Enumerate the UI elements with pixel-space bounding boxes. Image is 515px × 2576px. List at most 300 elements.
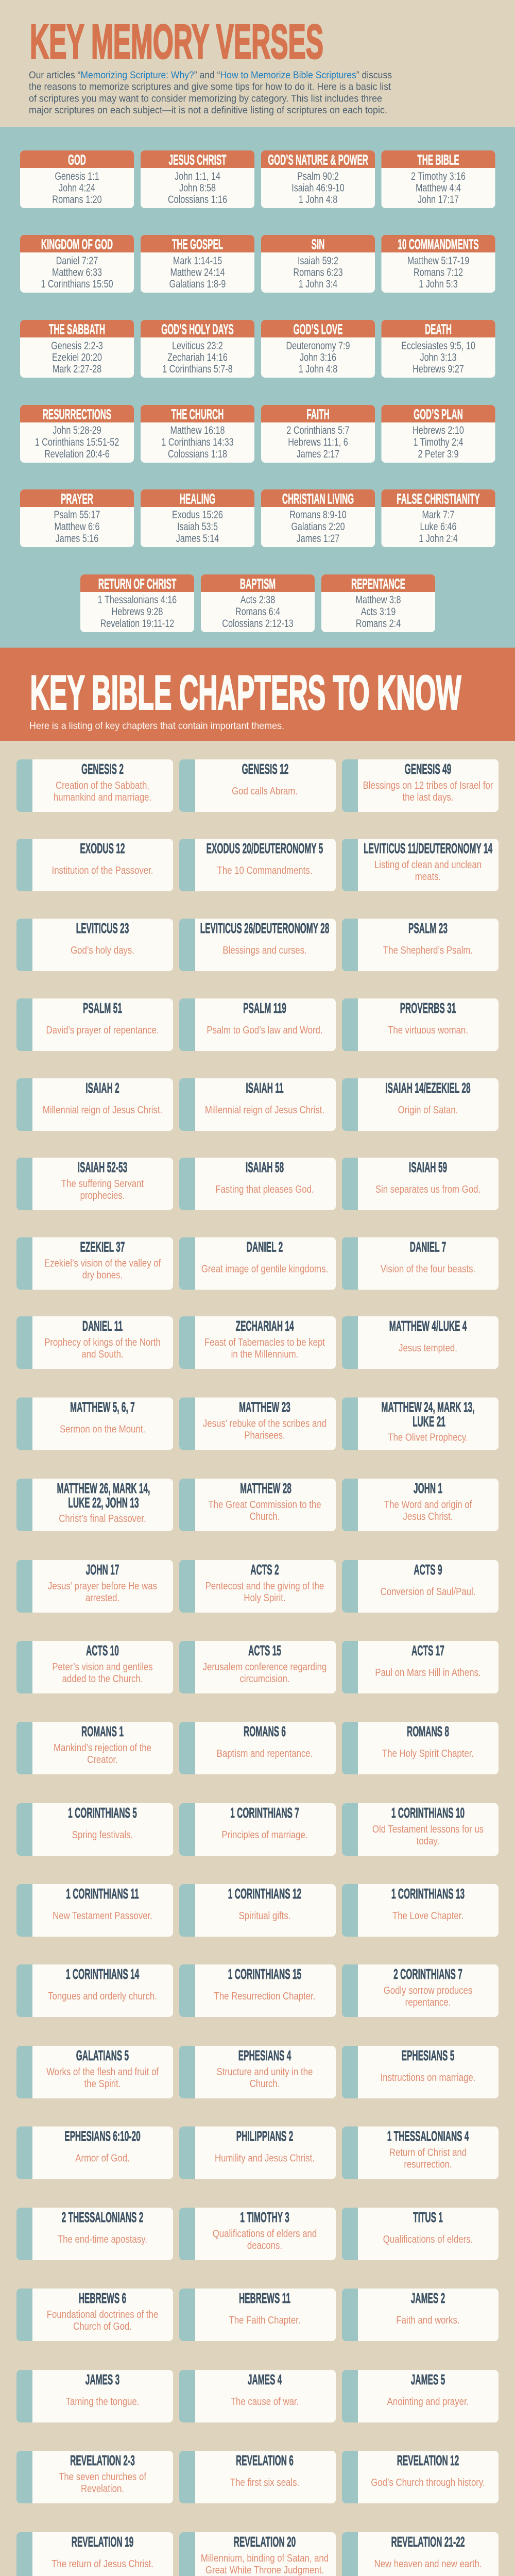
- card: The Church: [141, 405, 254, 463]
- card: Kingdom of God: KINGDOM OF GOD: [41, 236, 113, 252]
- card: John 1: The Word and origin of: [384, 1499, 472, 1510]
- card: 1 Timothy 3: Qualifications of elders and: [213, 2228, 317, 2239]
- card: 1 Corinthians 15: The Resurrection Chapter.: [214, 1990, 315, 2002]
- card: Galatians 5: Works of the flesh and fruit of: [46, 2066, 159, 2077]
- card: Return of Christ: Revelation 19:11-12: [100, 617, 174, 629]
- card: Proverbs 31: PROVERBS 31: [400, 1000, 456, 1016]
- card: Jesus Christ: JESUS CHRIST: [169, 152, 227, 168]
- card: The Gospel: Galatians 1:8-9: [169, 278, 226, 290]
- card: Baptism: Colossians 2:12-13: [222, 617, 294, 629]
- card: God's Love: John 3:16: [300, 351, 336, 363]
- card: The Church: THE CHURCH: [171, 406, 224, 422]
- card: Acts 9: ACTS 9: [414, 1562, 442, 1578]
- card: The Church: Colossians 1:18: [168, 448, 227, 460]
- section: key memory verses: [0, 0, 515, 648]
- card: John 17: arrested.: [85, 1592, 119, 1603]
- card: God's Holy Days: 1 Corinthians 5:7-8: [162, 363, 233, 375]
- card: God's nature and power: Isaiah 46:9-10: [291, 181, 345, 194]
- card: Healing: [141, 489, 254, 547]
- card: Kingdom of God: Matthew 6:33: [52, 266, 102, 278]
- card: James 2: JAMES 2: [411, 2290, 445, 2306]
- card: Repentance: REPENTANCE: [351, 576, 405, 592]
- card: Acts 9: [342, 1560, 499, 1613]
- intro paragraph: major scriptures on each subject—it is not a definitive listing of scriptures on each topic.: [29, 105, 387, 116]
- card: Galatians 5: the Spirit.: [84, 2078, 121, 2089]
- card: 1 Corinthians 11: 1 CORINTHIANS 11: [66, 1886, 139, 1902]
- card: James 5: [342, 2370, 499, 2422]
- card: 1 Corinthians 13: 1 CORINTHIANS 13: [391, 1886, 465, 1902]
- card: Death: Ecclesiastes 9:5, 10: [401, 340, 475, 351]
- card: John 1: [342, 1479, 499, 1531]
- card: John 17: Jesus’ prayer before He was: [48, 1580, 157, 1591]
- card: James 4: [179, 2370, 336, 2422]
- card: Isaiah 11: Millennial reign of Jesus Christ.: [205, 1104, 324, 1115]
- card: God's Holy Days: Zechariah 14:16: [167, 351, 228, 363]
- card: 1 Thessalonians 4: resurrection.: [404, 2158, 452, 2170]
- card: 1 Corinthians 11: [16, 1884, 173, 1937]
- card: Baptism: [201, 574, 315, 632]
- card: Acts 15: ACTS 15: [248, 1642, 281, 1658]
- card: The Church: Matthew 16:18: [170, 424, 225, 436]
- card: Acts 2: ACTS 2: [250, 1562, 279, 1578]
- card: God's Love: [261, 320, 375, 378]
- card: Genesis 49: the last days.: [403, 791, 453, 803]
- card: Faith: 2 Corinthians 5:7: [286, 424, 350, 436]
- card: Isaiah 2: ISAIAH 2: [85, 1080, 119, 1096]
- card: Ephesians 4: Structure and unity in the: [217, 2066, 313, 2077]
- card: Acts 15: [179, 1641, 336, 1693]
- card: Christian Living: [261, 489, 375, 547]
- card: God's Holy Days: [141, 320, 254, 378]
- card: Kingdom of God: Daniel 7:27: [56, 255, 98, 266]
- card: Romans 1: Creator.: [87, 1754, 118, 1765]
- card: Revelation 20: Great White Throne Judgment.: [205, 2564, 324, 2575]
- card: Acts 17: [342, 1641, 499, 1693]
- card: Sin: Romans 6:23: [293, 266, 343, 278]
- card: Revelation 21-22: [342, 2532, 499, 2576]
- card: God's Plan: 2 Peter 3:9: [418, 448, 459, 460]
- card: Matthew 5, 6, 7: MATTHEW 5, 6, 7: [70, 1399, 135, 1415]
- card: Jesus Christ: John 1:1, 14: [175, 170, 220, 182]
- card: 1 Corinthians 13: [342, 1884, 499, 1937]
- card: Leviticus 11 / Deuteronomy 14: meats.: [415, 871, 441, 882]
- card: Ephesians 5: Instructions on marriage.: [381, 2072, 475, 2083]
- card: Resurrections: 1 Corinthians 15:51-52: [35, 436, 119, 448]
- card: Ezekiel 37: EZEKIEL 37: [80, 1239, 125, 1255]
- card: The Gospel: THE GOSPEL: [172, 236, 223, 252]
- card: Resurrections: Revelation 20:4-6: [44, 448, 110, 460]
- intro paragraph: of scriptures you may want to consider memorizing by category. This list includes three: [29, 93, 382, 104]
- card: John 1: Jesus Christ.: [403, 1511, 453, 1522]
- card: 1 Corinthians 12: 1 CORINTHIANS 12: [228, 1886, 301, 1902]
- card: Resurrections: RESURRECTIONS: [43, 406, 111, 422]
- card: Zechariah 14: ZECHARIAH 14: [236, 1318, 294, 1334]
- card: 1 Corinthians 10: [342, 1803, 499, 1856]
- card: Psalm 119: Psalm to God’s law and Word.: [207, 1024, 323, 1036]
- card: Romans 6: [179, 1722, 336, 1774]
- card: Acts 10: [16, 1641, 173, 1693]
- card: Romans 1: ROMANS 1: [81, 1723, 124, 1739]
- card: Kingdom of God: [20, 235, 134, 293]
- card: Death: Hebrews 9:27: [413, 363, 464, 375]
- card: Leviticus 26 / Deuteronomy 28: [179, 919, 336, 971]
- card: Ephesians 6:10-20: Armor of God.: [75, 2152, 130, 2164]
- card: 1 Corinthians 5: [16, 1803, 173, 1856]
- card: Acts 10: Peter’s vision and gentiles: [52, 1661, 153, 1672]
- card: Exodus 12: Institution of the Passover.: [52, 865, 153, 876]
- card: Matthew 26, Mark 14, Luke 22, John 13: MATTHEW 26, MARK 14,: [57, 1480, 150, 1496]
- card: Isaiah 11: ISAIAH 11: [246, 1080, 284, 1096]
- card: Isaiah 2: Millennial reign of Jesus Christ.: [43, 1104, 162, 1115]
- card: Sin: [261, 235, 375, 293]
- card: Psalm 23: PSALM 23: [408, 920, 448, 936]
- card: Revelation 6: [179, 2451, 336, 2503]
- card: Genesis 2: Creation of the Sabbath,: [56, 779, 149, 791]
- card: Matthew 26, Mark 14, Luke 22, John 13: LUKE 22, JOHN 13: [68, 1495, 139, 1511]
- card: Death: DEATH: [425, 321, 452, 337]
- card: Genesis 12: [179, 759, 336, 812]
- card: Sin: Isaiah 59:2: [298, 255, 338, 266]
- card: Faith: James 2:17: [297, 448, 339, 460]
- card: Matthew 28: Church.: [250, 1511, 280, 1522]
- card: False Christianity: Mark 7:7: [422, 509, 454, 520]
- card: Romans 8: ROMANS 8: [407, 1723, 449, 1739]
- card: Sin: 1 John 3:4: [299, 278, 337, 290]
- card: James 5: Anointing and prayer.: [387, 2396, 469, 2407]
- card: Matthew 5, 6, 7: Sermon on the Mount.: [60, 1423, 145, 1435]
- card: Ezekiel 37: [16, 1238, 173, 1290]
- card: Titus 1: Qualifications of elders.: [383, 2233, 473, 2245]
- card: Psalm 119: [179, 998, 336, 1051]
- card: Genesis 12: God calls Abram.: [232, 785, 298, 796]
- card: 10 Commandments: 1 John 5:3: [419, 278, 458, 290]
- card: Acts 2: Pentecost and the giving of the: [205, 1580, 324, 1591]
- card: Titus 1: [342, 2208, 499, 2260]
- card: Zechariah 14: [179, 1316, 336, 1369]
- card: Leviticus 26 / Deuteronomy 28: LEVITICUS 26/DEUTERONOMY 28: [200, 920, 329, 936]
- card: Genesis 49: GENESIS 49: [405, 761, 451, 777]
- card: Repentance: Matthew 3:8: [355, 594, 401, 605]
- card: Romans 1: [16, 1722, 173, 1774]
- card: Resurrections: [20, 405, 134, 463]
- card: God's Plan: 1 Timothy 2:4: [413, 436, 464, 448]
- card: Ephesians 6:10-20: [16, 2127, 173, 2179]
- card: Acts 15: circumcision.: [239, 1673, 290, 1684]
- card: John 1: JOHN 1: [414, 1480, 442, 1496]
- card: 1 Timothy 3: 1 TIMOTHY 3: [240, 2209, 289, 2225]
- subtitle: Here is a listing of key chapters that contain important themes.: [29, 720, 284, 732]
- card: The Bible: John 17:17: [418, 193, 459, 205]
- card: Repentance: [321, 574, 435, 632]
- card: Christian Living: Galatians 2:20: [291, 520, 345, 532]
- card: Prayer: Psalm 55:17: [54, 509, 100, 520]
- card: God's Plan: Hebrews 2:10: [413, 424, 464, 436]
- card: Matthew 28: [179, 1479, 336, 1531]
- card: Zechariah 14: in the Millennium.: [231, 1348, 298, 1360]
- card: The Church: 1 Corinthians 14:33: [161, 436, 234, 448]
- card: Genesis 12: GENESIS 12: [242, 761, 288, 777]
- card: Genesis 2: [16, 759, 173, 812]
- card: Acts 17: Paul on Mars Hill in Athens.: [375, 1667, 481, 1678]
- card: The Sabbath: Genesis 2:2-3: [51, 340, 103, 351]
- card: God: Romans 1:20: [52, 193, 102, 205]
- card: Hebrews 6: [16, 2289, 173, 2341]
- card: 1 Corinthians 12: Spiritual gifts.: [239, 1910, 290, 1921]
- card: 1 Timothy 3: deacons.: [247, 2240, 282, 2251]
- card: God's Holy Days: Leviticus 23:2: [172, 340, 223, 351]
- card: 1 Corinthians 15: 1 CORINTHIANS 15: [228, 1966, 301, 1982]
- card: 2 Corinthians 7: repentance.: [405, 1996, 451, 2008]
- card: Prayer: PRAYER: [61, 491, 93, 507]
- card: Daniel 7: [342, 1238, 499, 1290]
- card: Revelation 20: [179, 2532, 336, 2576]
- card: Ephesians 4: EPHESIANS 4: [238, 2047, 291, 2063]
- card: Revelation 21-22: REVELATION 21-22: [391, 2534, 465, 2550]
- card: Philippians 2: Humility and Jesus Christ.: [215, 2152, 315, 2164]
- card: Prayer: James 5:16: [56, 532, 98, 544]
- card: The Sabbath: Mark 2:27-28: [53, 363, 101, 375]
- card: James 2: [342, 2289, 499, 2341]
- card: 1 Corinthians 10: today.: [417, 1835, 439, 1846]
- card: 1 Thessalonians 4: 1 THESSALONIANS 4: [387, 2128, 469, 2144]
- card: 2 Thessalonians 2: 2 THESSALONIANS 2: [62, 2209, 143, 2225]
- card: Ephesians 4: Church.: [250, 2078, 280, 2089]
- card: James 3: Taming the tongue.: [66, 2396, 139, 2407]
- card: Return of Christ: RETURN OF CHRIST: [98, 576, 176, 592]
- card: God's Love: Deuteronomy 7:9: [286, 340, 350, 351]
- card: Daniel 2: Great image of gentile kingdoms.: [201, 1263, 328, 1275]
- card: Leviticus 23: LEVITICUS 23: [76, 920, 129, 936]
- card: Daniel 11: and South.: [81, 1348, 124, 1360]
- card: 2 Corinthians 7: [342, 1964, 499, 2017]
- card: Revelation 2-3: REVELATION 2-3: [70, 2452, 135, 2468]
- card: Revelation 21-22: New heaven and new earth.: [374, 2558, 482, 2569]
- card: Healing: HEALING: [180, 491, 215, 507]
- card: Isaiah 52-53: The suffering Servant: [61, 1178, 144, 1189]
- card: Zechariah 14: Feast of Tabernacles to be kept: [204, 1336, 325, 1348]
- card: Return of Christ: Hebrews 9:28: [112, 605, 163, 617]
- card: Revelation 19: REVELATION 19: [72, 2534, 133, 2550]
- card: False Christianity: 1 John 2:4: [419, 532, 458, 544]
- card: Healing: Isaiah 53:5: [177, 520, 218, 532]
- card: Romans 6: ROMANS 6: [244, 1723, 286, 1739]
- card: Kingdom of God: 1 Corinthians 15:50: [41, 278, 113, 290]
- card: The Bible: 2 Timothy 3:16: [411, 170, 466, 182]
- card: Faith: Hebrews 11:1, 6: [288, 436, 348, 448]
- card: God's nature and power: GOD’S NATURE & POWER: [268, 152, 368, 168]
- card: Isaiah 59: ISAIAH 59: [409, 1159, 447, 1175]
- card: Christian Living: CHRISTIAN LIVING: [282, 491, 354, 507]
- card: 1 Corinthians 10: 1 CORINTHIANS 10: [391, 1805, 465, 1821]
- card: Genesis 2: humankind and marriage.: [54, 791, 151, 803]
- card: Return of Christ: 1 Thessalonians 4:16: [98, 594, 177, 605]
- card: Death: [381, 320, 495, 378]
- card: James 5: JAMES 5: [411, 2371, 445, 2387]
- card: Philippians 2: [179, 2127, 336, 2179]
- card: Isaiah 14 / Ezekiel 28: Origin of Satan.: [398, 1104, 458, 1115]
- card: Matthew 23: [179, 1397, 336, 1450]
- card: Acts 17: ACTS 17: [411, 1642, 444, 1658]
- card: 1 Timothy 3: [179, 2208, 336, 2260]
- card: Psalm 51: [16, 998, 173, 1051]
- card: 1 Corinthians 15: [179, 1964, 336, 2017]
- card: Matthew 23: Pharisees.: [244, 1429, 285, 1441]
- card: Death: John 3:13: [420, 351, 457, 363]
- card: Baptism: BAPTISM: [240, 576, 276, 592]
- card: Leviticus 23: God’s holy days.: [71, 944, 134, 956]
- card: Isaiah 14 / Ezekiel 28: [342, 1078, 499, 1131]
- card: Christian Living: Romans 8:9-10: [289, 509, 347, 520]
- card: The Sabbath: [20, 320, 134, 378]
- card: Romans 1: Mankind’s rejection of the: [54, 1742, 151, 1753]
- card: False Christianity: Luke 6:46: [420, 520, 457, 532]
- card: Hebrews 11: The Faith Chapter.: [229, 2314, 301, 2326]
- card: Exodus 20 / Deuteronomy 5: EXODUS 20/DEUTERONOMY 5: [207, 840, 323, 856]
- card: Healing: James 5:14: [176, 532, 219, 544]
- card: Matthew 5, 6, 7: [16, 1397, 173, 1450]
- card: Matthew 26, Mark 14, Luke 22, John 13: Christ’s final Passover.: [59, 1513, 146, 1524]
- card: 2 Thessalonians 2: [16, 2208, 173, 2260]
- card: 1 Corinthians 14: Tongues and orderly church.: [48, 1990, 157, 2002]
- card: Exodus 20 / Deuteronomy 5: The 10 Commandments.: [217, 865, 312, 876]
- card: God: [20, 150, 134, 208]
- card: James 2: Faith and works.: [396, 2314, 460, 2326]
- card: Revelation 20: Millennium, binding of Satan, and: [201, 2552, 329, 2564]
- card: Psalm 23: [342, 919, 499, 971]
- card: Titus 1: TITUS 1: [413, 2209, 443, 2225]
- card: God's nature and power: [261, 150, 375, 208]
- card: The Gospel: Matthew 24:14: [170, 266, 225, 278]
- card: Revelation 12: God’s Church through history.: [371, 2477, 485, 2488]
- card: God: Genesis 1:1: [55, 170, 99, 182]
- card: 10 Commandments: 10 COMMANDMENTS: [398, 236, 479, 252]
- card: Revelation 2-3: The seven churches of: [59, 2471, 147, 2482]
- card: Christian Living: James 1:27: [297, 532, 339, 544]
- card: God's Love: 1 John 4:8: [299, 363, 337, 375]
- card: God's nature and power: 1 John 4:8: [299, 193, 337, 205]
- card: 2 Corinthians 7: 2 CORINTHIANS 7: [393, 1966, 462, 1982]
- card: God's Love: GOD’S LOVE: [294, 321, 342, 337]
- intro paragraph: [29, 70, 392, 116]
- card: Psalm 51: PSALM 51: [83, 1000, 122, 1016]
- card: God's Plan: [381, 405, 495, 463]
- card: 10 Commandments: Matthew 5:17-19: [407, 255, 469, 266]
- card: God's Plan: GOD’S PLAN: [414, 406, 463, 422]
- card: Jesus Christ: [141, 150, 254, 208]
- card: 1 Corinthians 5: 1 CORINTHIANS 5: [68, 1805, 137, 1821]
- card: Philippians 2: PHILIPPIANS 2: [236, 2128, 293, 2144]
- card: Revelation 12: [342, 2451, 499, 2503]
- card: Ezekiel 37: Ezekiel’s vision of the valley of: [44, 1257, 161, 1269]
- card: Isaiah 58: Fasting that pleases God.: [215, 1183, 314, 1195]
- card: Daniel 11: Prophecy of kings of the North: [44, 1336, 161, 1348]
- card: God's Holy Days: GOD’S HOLY DAYS: [161, 321, 234, 337]
- card: The Bible: [381, 150, 495, 208]
- card: Genesis 49: [342, 759, 499, 812]
- card: 1 Corinthians 11: New Testament Passover.: [53, 1910, 152, 1921]
- card: Daniel 11: DANIEL 11: [82, 1318, 123, 1334]
- card: Revelation 2-3: Revelation.: [81, 2483, 124, 2494]
- card: Healing: Exodus 15:26: [172, 509, 223, 520]
- card: Faith: FAITH: [306, 406, 330, 422]
- card: The Bible: Matthew 4:4: [416, 181, 461, 194]
- card: Leviticus 11 / Deuteronomy 14: LEVITICUS 11/DEUTERONOMY 14: [364, 840, 492, 856]
- card: Matthew 24, Mark 13, Luke 21: The Olivet Prophecy.: [388, 1431, 468, 1443]
- card: 1 Thessalonians 4: [342, 2127, 499, 2179]
- card: James 3: [16, 2370, 173, 2422]
- card: Romans 6: Baptism and repentance.: [217, 1748, 313, 1759]
- card: Baptism: Romans 6:4: [235, 605, 280, 617]
- card: Leviticus 26 / Deuteronomy 28: Blessings and curses.: [222, 944, 307, 956]
- card: John 17: [16, 1560, 173, 1613]
- card: Isaiah 2: [16, 1078, 173, 1131]
- card: Sin: SIN: [312, 236, 324, 252]
- card: Matthew 24, Mark 13, Luke 21: LUKE 21: [413, 1414, 445, 1430]
- card: Acts 2: Holy Spirit.: [244, 1592, 286, 1603]
- card: Leviticus 11 / Deuteronomy 14: Listing of clean and unclean: [374, 859, 482, 870]
- card: The Sabbath: Ezekiel 20:20: [52, 351, 102, 363]
- card: Jesus Christ: John 8:58: [179, 181, 216, 194]
- card: The Bible: THE BIBLE: [417, 152, 459, 168]
- card: 1 Corinthians 7: Principles of marriage.: [222, 1829, 307, 1840]
- card: Isaiah 11: [179, 1078, 336, 1131]
- card: Isaiah 52-53: prophecies.: [80, 1190, 125, 1201]
- card: Genesis 2: GENESIS 2: [81, 761, 124, 777]
- card: God's nature and power: Psalm 90:2: [297, 170, 339, 182]
- card: Daniel 2: DANIEL 2: [247, 1239, 283, 1255]
- card: Daniel 7: Vision of the four beasts.: [381, 1263, 475, 1275]
- card: Revelation 6: The first six seals.: [230, 2477, 299, 2488]
- card: Hebrews 6: Foundational doctrines of the: [47, 2309, 158, 2320]
- card: Isaiah 59: [342, 1158, 499, 1210]
- card: Prayer: Matthew 6:6: [54, 520, 100, 532]
- card: False Christianity: FALSE CHRISTIANITY: [397, 491, 480, 507]
- card: Revelation 19: [16, 2532, 173, 2576]
- card: Prayer: [20, 489, 134, 547]
- card: Exodus 12: [16, 839, 173, 891]
- card: Acts 15: Jerusalem conference regarding: [203, 1661, 327, 1672]
- card: False Christianity: [381, 489, 495, 547]
- card: Revelation 6: REVELATION 6: [236, 2452, 294, 2468]
- card: Faith: [261, 405, 375, 463]
- card: Hebrews 6: HEBREWS 6: [79, 2290, 126, 2306]
- card: Matthew 4 / Luke 4: MATTHEW 4/LUKE 4: [389, 1318, 467, 1334]
- card: James 3: JAMES 3: [85, 2371, 119, 2387]
- card: Daniel 11: [16, 1316, 173, 1369]
- card: Resurrections: John 5:28-29: [53, 424, 101, 436]
- card: Matthew 24, Mark 13, Luke 21: MATTHEW 24, MARK 13,: [382, 1399, 474, 1415]
- card: 2 Thessalonians 2: The end-time apostasy.: [58, 2233, 147, 2245]
- card: 1 Corinthians 14: [16, 1964, 173, 2017]
- card: Matthew 26, Mark 14, Luke 22, John 13: [16, 1479, 173, 1531]
- card: Matthew 4 / Luke 4: [342, 1316, 499, 1369]
- card: Isaiah 58: [179, 1158, 336, 1210]
- card: 1 Thessalonians 4: Return of Christ and: [389, 2146, 467, 2158]
- card: Ephesians 6:10-20: EPHESIANS 6:10-20: [64, 2128, 141, 2144]
- card: Matthew 23: MATTHEW 23: [239, 1399, 290, 1415]
- card: 1 Corinthians 5: Spring festivals.: [72, 1829, 133, 1840]
- card: Repentance: Romans 2:4: [356, 617, 401, 629]
- card: Ephesians 5: EPHESIANS 5: [402, 2047, 454, 2063]
- card: Acts 9: Conversion of Saul/Paul.: [381, 1586, 475, 1597]
- card: Proverbs 31: [342, 998, 499, 1051]
- card: Galatians 5: GALATIANS 5: [76, 2047, 129, 2063]
- card: 1 Corinthians 7: 1 CORINTHIANS 7: [230, 1805, 299, 1821]
- card: James 4: The cause of war.: [231, 2396, 299, 2407]
- card: God: John 4:24: [59, 181, 95, 194]
- card: Return of Christ: [80, 574, 194, 632]
- card: Acts 2: [179, 1560, 336, 1613]
